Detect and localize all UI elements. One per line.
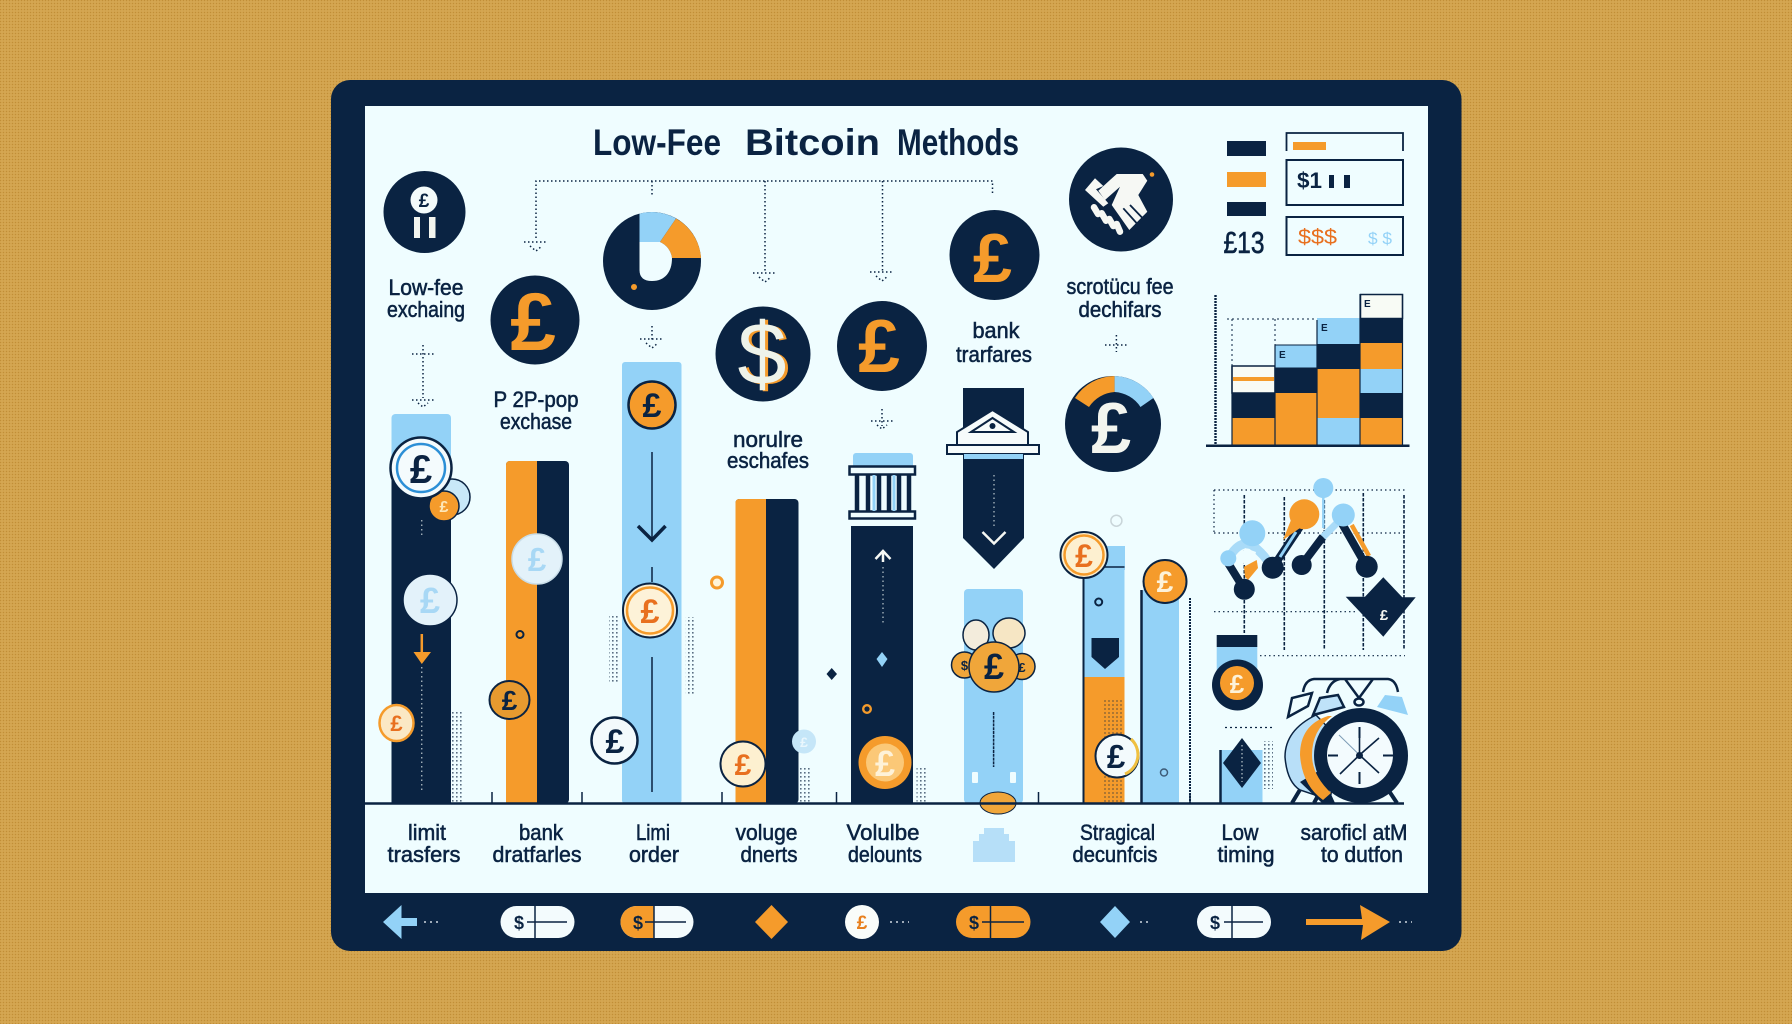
coin: pale floating: [792, 730, 816, 754]
icon: coin badge 1: £: [419, 191, 430, 212]
footer: pill orange 2: [956, 906, 1030, 938]
label: bank transfers: [956, 318, 1032, 367]
footer: pill white 2: $: [1210, 913, 1220, 933]
label: strategic fee discounts: [1066, 274, 1174, 322]
label: low timing: [1218, 820, 1274, 867]
label: limit order: order: [629, 842, 679, 867]
coin: ringed orange: £: [1230, 669, 1245, 699]
footer: pound token: £: [857, 913, 868, 934]
icon: pound gauge badge: £: [1091, 389, 1131, 469]
stacked bar chart: [1206, 294, 1410, 446]
coin: bar 7 top: [1060, 532, 1108, 578]
coin: bar 5: [858, 736, 912, 789]
footer: orange diamond: [755, 905, 788, 939]
line chart: £: [1380, 607, 1389, 624]
footer: pill orange 1: [620, 906, 694, 938]
bar 7: strategic: [1083, 546, 1125, 804]
icon: donut chart: [603, 212, 701, 310]
coin: pale bar 1: £: [420, 580, 440, 621]
bar 8: [1140, 581, 1190, 804]
title: Methods: [897, 122, 1019, 163]
coin cluster: bar 1 top: [390, 438, 470, 521]
label: bank drafts: bank: [519, 820, 564, 845]
label: ATM solution: saroficl atM: [1300, 820, 1408, 845]
bottom labels: [388, 820, 1408, 867]
coin: bar 3 low: [592, 718, 638, 764]
coin: dark orange bar 2: [490, 631, 530, 719]
coin: pale bar 2: [512, 534, 562, 584]
icon: dollar badge: $: [741, 305, 789, 404]
label: volume discounts: [736, 820, 798, 867]
pentagon arrow with bank roof: [947, 388, 1039, 569]
coin: pale bar 2: £: [528, 541, 547, 578]
frame: [331, 80, 1462, 951]
stacked bar chart: E: [1364, 299, 1371, 310]
label: nominal exchanges: norulre: [733, 427, 803, 452]
coin: orange bar 1 low: £: [390, 711, 403, 736]
label: volume discounts: dnerts: [740, 842, 798, 867]
label: volume discounts 2: [846, 820, 922, 867]
label: strategic discounts: [1072, 820, 1158, 867]
footer: right arrow: [1306, 905, 1412, 940]
icon: pound badge 3: £: [858, 304, 900, 388]
coin cluster: bar 1 top: £: [440, 499, 449, 516]
footer: pill orange 1: $: [633, 913, 643, 933]
icon: pound badge 4: [950, 210, 1040, 300]
coin: orange bar 1 low: [380, 705, 414, 741]
dotted connector tree: [412, 181, 1129, 429]
stacked bar chart: E: [1321, 323, 1328, 334]
line chart: [1214, 478, 1416, 656]
coin: bar 4: [720, 742, 766, 786]
footer: pill white 1: [500, 906, 574, 938]
legend: fee table: [1224, 133, 1403, 260]
coin: bar 7 low: [1096, 734, 1138, 778]
label: bank transfers: bank: [972, 318, 1020, 343]
label: ATM solution: [1300, 820, 1408, 867]
label: low timing: timing: [1218, 842, 1274, 867]
stacked bar chart: E: [1279, 350, 1286, 361]
label: low timing: Low: [1222, 820, 1259, 845]
legend: fee table: $1: [1297, 168, 1322, 193]
bar 2: bank drafts: [506, 461, 569, 804]
footer: pill white 1: $: [514, 913, 524, 933]
label: volume discounts 2: Volulbe: [846, 820, 920, 845]
label: nominal exchanges: eschafes: [727, 448, 809, 473]
label: limit transfers: limit: [408, 820, 446, 845]
footer: blue diamond: [1100, 906, 1148, 938]
footer: pill white 2: [1197, 906, 1271, 938]
label: low-fee exchange: [387, 275, 465, 322]
coin pile: [952, 618, 1035, 692]
coin: bar 8: [1144, 560, 1186, 603]
bar 9: low timing: [1217, 635, 1273, 804]
coin: bar 3 low: £: [606, 723, 625, 761]
icon: pound badge 3: [837, 301, 927, 391]
coin: pale floating: £: [800, 734, 808, 750]
label: limit transfers: trasfers: [388, 842, 460, 867]
coin: bar 5: £: [875, 743, 895, 784]
bar 3: limit order: [609, 362, 696, 804]
label: low-fee exchange: exchaing: [387, 297, 465, 322]
icon: dollar badge: $: [738, 304, 786, 403]
icon: pound gauge badge: [1065, 376, 1161, 472]
label: limit order: Limi: [636, 820, 670, 845]
coin: pale bar 1: [403, 574, 457, 626]
bar 4: volume discounts: [736, 499, 812, 804]
coin: half coin on baseline: [980, 792, 1016, 814]
title: Low-Fee: [593, 122, 721, 163]
label: volume discounts: voluge: [736, 820, 798, 845]
label: strategic fee discounts: dechifars: [1078, 297, 1162, 322]
ring: small orange: [712, 577, 722, 588]
label: strategic discounts: Stragical: [1080, 820, 1155, 845]
bar 6: light blue: [964, 589, 1023, 804]
coin pile: $: [961, 658, 969, 673]
label: bank drafts: dratfarles: [492, 842, 582, 867]
coin: bar 3 middle: £: [641, 593, 660, 631]
coin: bar 3 middle: [623, 584, 677, 638]
coin: bar 3 top: £: [643, 387, 662, 425]
footer: pill orange 2: $: [969, 913, 979, 933]
label: volume discounts 2: delounts: [848, 842, 922, 867]
label: strategic discounts: decunfcis: [1072, 842, 1158, 867]
label: limit order: [629, 820, 679, 867]
label: low-fee exchange: Low-fee: [388, 275, 464, 300]
label: limit transfers: [388, 820, 460, 867]
legend: fee table: $$$: [1298, 226, 1337, 249]
legend: fee table: $ $: [1368, 229, 1393, 248]
coin: bar 8: £: [1157, 566, 1174, 599]
legend: fee table: £13: [1224, 225, 1264, 260]
coin: bar 3 top: [628, 382, 676, 428]
coin: bar 4: £: [735, 749, 752, 782]
icon: stacked blocks: [973, 828, 1015, 862]
label: strategic fee discounts: scrotücu fee: [1066, 274, 1174, 299]
icon: pound badge 4: £: [973, 219, 1012, 297]
title: [593, 122, 1019, 163]
label: bank transfers: trarfares: [956, 342, 1032, 367]
label: ATM solution: to dutfon: [1321, 842, 1403, 867]
footer: left arrow: [383, 905, 438, 939]
label: nominal exchanges: [727, 427, 809, 473]
baseline: [365, 802, 1404, 805]
coin: dark orange bar 2: £: [502, 685, 518, 716]
bar 1: limit transfers: [392, 414, 464, 804]
ghost ring: [1111, 515, 1122, 526]
icon: dollar badge: [716, 304, 810, 404]
coin pile: £: [1018, 660, 1026, 675]
icon: pound badge 2: £: [510, 277, 556, 368]
coin cluster: bar 1 top: £: [410, 448, 432, 492]
icon: handshake badge: [1069, 148, 1173, 252]
label: P2P exchange: exchase: [500, 409, 572, 434]
label: P2P exchange: P 2P-pop: [494, 387, 578, 412]
icon: pound badge 2: [490, 276, 580, 368]
bar 5: volume with pillars: [826, 453, 928, 804]
footer: pound token: [845, 905, 909, 939]
coin pile: £: [984, 646, 1004, 687]
label: P2P exchange: [494, 387, 578, 434]
dotted base ticks: [492, 792, 1190, 803]
label: bank drafts: [492, 820, 582, 867]
icon: coin badge 1: [384, 171, 466, 253]
coin: ringed orange: [1212, 660, 1263, 710]
coin: bar 7 top: £: [1075, 538, 1093, 574]
coin: bar 7 low: £: [1107, 738, 1126, 775]
panel: [365, 106, 1428, 893]
icon: alarm clock: [1285, 679, 1408, 803]
title: Bitcoin: [745, 122, 880, 163]
